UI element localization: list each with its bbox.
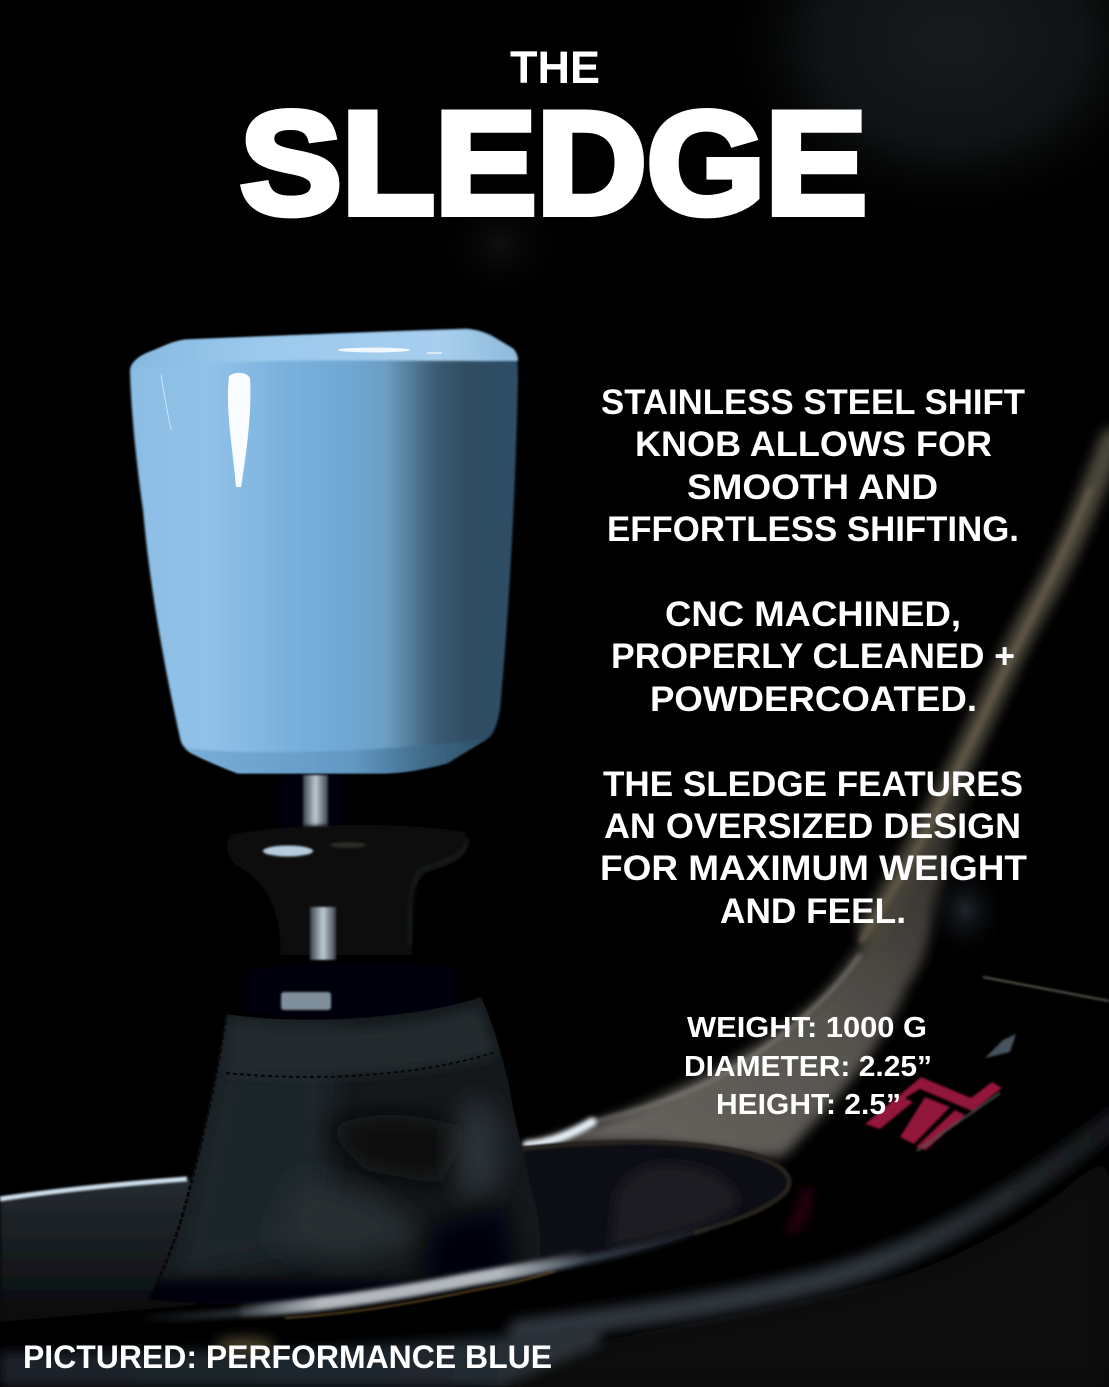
spoke rim bright line [862, 490, 1090, 940]
knob bottom bevel [185, 738, 488, 773]
shifter shaft [227, 772, 468, 1018]
text block: design description: AND FEEL. [720, 892, 906, 931]
base disc highlight [281, 992, 331, 1010]
boot lower lit fold [286, 1180, 418, 1266]
spoke bright highlight at console [527, 1122, 592, 1145]
soft lump behind panel [923, 860, 1007, 960]
lower stem highlight [310, 907, 336, 960]
text block: machining description: CNC MACHINED, [665, 595, 961, 634]
text block: material description: STAINLESS STEEL SHIFT [601, 383, 1025, 422]
grey band under caption [0, 1326, 600, 1387]
arc soft blue halo [143, 1228, 710, 1318]
knob left edge glint [161, 375, 171, 430]
text block: design description: FOR MAXIMUM WEIGHT [600, 849, 1027, 888]
carbon panel [690, 965, 1109, 1300]
boot stitching [226, 1052, 496, 1077]
collar highlight [263, 846, 313, 856]
left console floor [0, 1178, 195, 1322]
shifter base ring rim [512, 1142, 789, 1233]
shift knob [130, 329, 518, 773]
boot fold shadow [325, 1115, 470, 1185]
text block: material description: KNOB ALLOWS FOR [635, 425, 992, 464]
text block: machining description [611, 595, 1015, 719]
knob small reflection [427, 352, 442, 354]
steering-wheel spoke lower body [523, 770, 980, 1157]
boot right lit fold [454, 1100, 502, 1200]
text block: machining description: POWDERCOATED. [650, 680, 977, 719]
collar ring [227, 825, 468, 955]
base disc [242, 962, 461, 1018]
steering-wheel spoke upper rim glow [870, 440, 1109, 930]
console light arc [143, 1228, 710, 1318]
specifications: WEIGHT: 1000 G [687, 1012, 927, 1044]
text block: material description: EFFORTLESS SHIFTING. [607, 510, 1019, 549]
lower-right warm floor [400, 1150, 1109, 1387]
STI logo centre stripes [900, 1097, 950, 1144]
heading: SLEDGE: SLEDGE [240, 82, 867, 244]
spoke bright inner edge [592, 955, 860, 1122]
arc warm rim [285, 1271, 555, 1318]
caption: pictured colour: PICTURED: PERFORMANCE BLUE [23, 1339, 552, 1375]
knob top reflection [338, 348, 410, 352]
shifter base ring [512, 1142, 790, 1272]
upper stem highlight [303, 775, 328, 827]
knob top bevel [131, 329, 518, 369]
collar warm glint [330, 842, 366, 848]
text block: design description: THE SLEDGE FEATURES [603, 765, 1023, 804]
boot fold inside ring [610, 1164, 738, 1248]
specifications: DIAMETER: 2.25” [684, 1051, 932, 1083]
boot left seam [148, 1014, 226, 1300]
STI logo right stripe [916, 1110, 965, 1150]
knob body [130, 329, 518, 773]
panel edge line [983, 977, 1109, 1001]
boot body [148, 997, 541, 1304]
knob main reflection [228, 373, 250, 487]
text block: design description: AN OVERSIZED DESIGN [604, 807, 1021, 846]
boot lower right shadow [418, 1202, 520, 1278]
red trim accent [790, 1188, 806, 1232]
faint upper-centre haze [430, 185, 570, 305]
STI logo [865, 1077, 1002, 1151]
left console highlight [0, 1179, 187, 1199]
STI logo bevel [917, 1093, 1000, 1151]
text block: material description [601, 383, 1025, 549]
carbon panel fleck [985, 1034, 1016, 1058]
boot left lit panel [170, 1020, 340, 1280]
arc bright segment [240, 1256, 585, 1311]
warm reflection behind caption [215, 1337, 275, 1353]
specifications: HEIGHT: 2.5” [716, 1089, 901, 1121]
STI logo outer stripe [865, 1077, 1002, 1129]
faint upper-right interior haze [710, 0, 1109, 230]
lower console grey band [520, 1120, 1109, 1331]
boot collar shading [226, 1005, 496, 1076]
text block: material description: SMOOTH AND [687, 468, 938, 507]
boot hem shadow [150, 1276, 424, 1304]
upper stem [280, 772, 346, 832]
collar ring right contour [410, 838, 467, 945]
text block: machining description: PROPERLY CLEANED + [611, 637, 1015, 676]
heading: THE: THE [510, 42, 600, 93]
leather boot [140, 997, 550, 1310]
text block: design description [600, 765, 1027, 931]
specifications [684, 1012, 932, 1121]
